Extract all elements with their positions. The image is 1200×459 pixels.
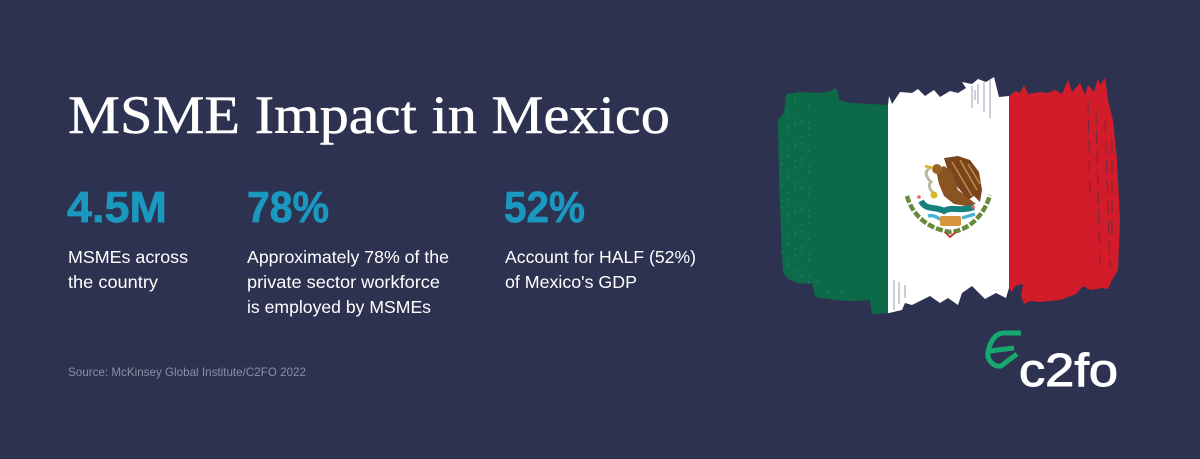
stat: 4.5M MSMEs: the country — [68, 272, 158, 292]
stat: 52% GDP — [504, 183, 696, 292]
stat: 52% GDP: Account for HALF (52%) — [505, 247, 696, 267]
source note: Source: McKinsey Global Institute/C2FO 2022 — [68, 365, 306, 379]
stat: 4.5M MSMEs: 4.5M — [67, 183, 167, 232]
cactus — [921, 201, 974, 211]
stat: 78% workforce: private sector workforce — [247, 272, 440, 292]
stat: 78% workforce: Approximately 78% of the — [247, 247, 449, 267]
eagle body — [936, 166, 976, 206]
logo leaf mark — [988, 333, 1021, 366]
white stripe — [888, 77, 1009, 313]
stat: 78% workforce: is employed by MSMEs — [247, 297, 431, 317]
red stripe — [1009, 78, 1120, 304]
stat: 4.5M MSMEs — [67, 183, 188, 292]
eagle head — [932, 164, 942, 174]
logo wordmark: c2fo — [1019, 344, 1118, 396]
water and base — [928, 214, 975, 220]
C2FO logo — [988, 333, 1118, 396]
white stripe ragged streaks — [894, 80, 990, 310]
stat: 4.5M MSMEs: MSMEs across — [68, 247, 188, 267]
stat: 78% workforce — [247, 183, 449, 317]
beak and snake — [926, 168, 936, 194]
title: MSME Impact in Mexico — [68, 85, 670, 145]
coat of arms — [907, 156, 990, 237]
stat: 78% workforce: 78% — [247, 183, 329, 232]
Mexican flag brush illustration — [778, 77, 1120, 314]
eagle wing — [944, 156, 982, 202]
wreath — [907, 195, 990, 232]
stat: 52% GDP: 52% — [504, 183, 585, 232]
green stripe — [778, 88, 888, 314]
stat: 52% GDP: of Mexico's GDP — [505, 272, 637, 292]
